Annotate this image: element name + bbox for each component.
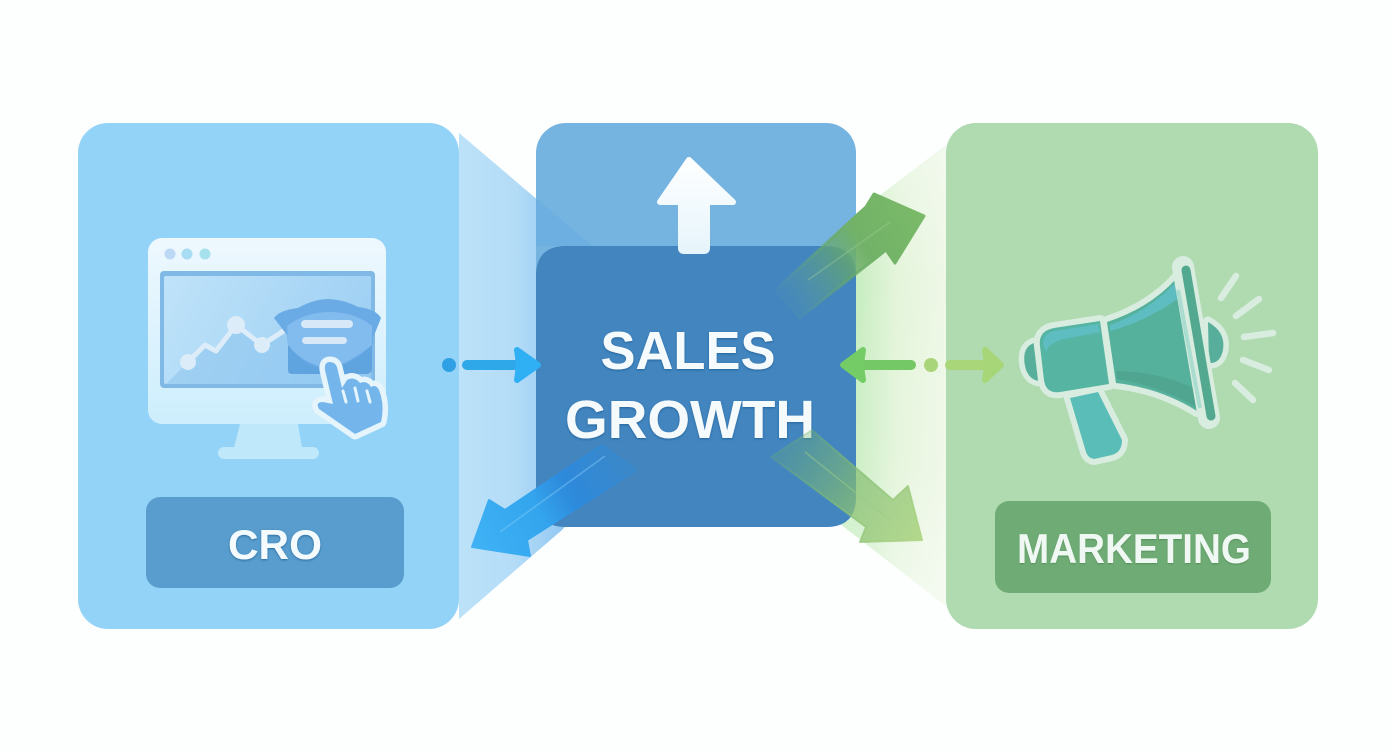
arrow: bottom left xyxy=(472,445,637,556)
arrow: marketing to sales xyxy=(843,350,1001,380)
heading: Sales Growth: SALES xyxy=(600,321,776,381)
panel: Marketing xyxy=(946,123,1318,629)
icon: monitor with chart and click xyxy=(148,238,386,459)
lower card xyxy=(536,246,856,527)
panel: Sales Growth xyxy=(536,123,856,527)
label: Marketing: MARKETING xyxy=(1017,525,1251,572)
heading: Sales Growth xyxy=(565,321,815,450)
arrow: CRO to sales xyxy=(442,350,538,380)
arrow: top right xyxy=(775,194,924,318)
left projection seen through card xyxy=(536,198,592,246)
icon: pointing hand xyxy=(318,362,383,434)
label: CRO: CRO xyxy=(228,521,322,568)
arrow: up xyxy=(660,160,733,251)
connector: right projection xyxy=(835,145,946,606)
connector: left projection xyxy=(459,133,640,619)
icon: megaphone xyxy=(1024,267,1273,459)
heading: Sales Growth: GROWTH xyxy=(565,390,815,450)
arrow: bottom right xyxy=(771,430,922,542)
panel: CRO xyxy=(78,123,459,629)
upper card xyxy=(536,123,856,527)
icon: sound rays xyxy=(1221,276,1273,400)
icon: popup badge xyxy=(274,299,381,374)
label: CRO xyxy=(146,497,404,588)
label: Marketing xyxy=(995,501,1271,593)
